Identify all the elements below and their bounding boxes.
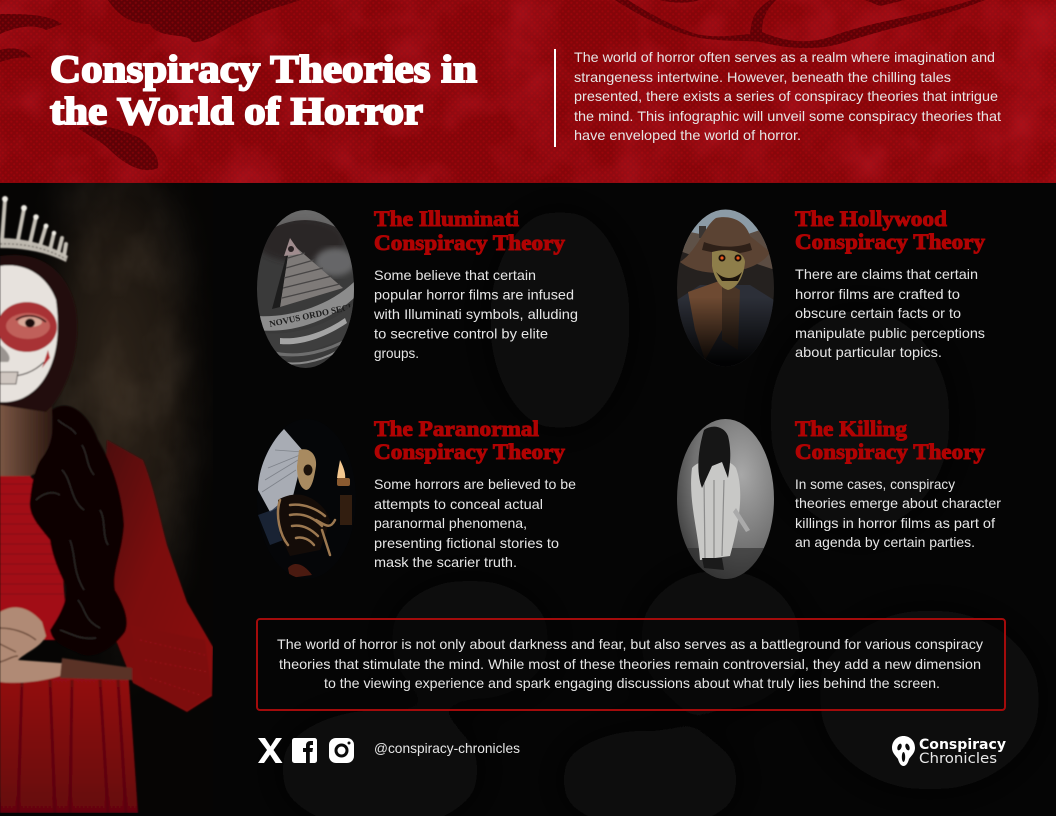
image: illuminati pyramid on dollar bill: NOVUS ORDO SECLORUM (268, 295, 383, 329)
text: hollywood: about particular topics. (795, 344, 942, 360)
panel: red header (0, 0, 1056, 183)
hat (680, 217, 770, 273)
heading: paranormal (374, 416, 565, 464)
text: illuminati: groups. (374, 345, 419, 361)
text: illuminati (373, 267, 578, 361)
heading: killing: The Killing (795, 416, 907, 441)
text: killing: killings in horror films as part of (795, 515, 995, 531)
heading: hollywood: Conspiracy Theory (795, 229, 985, 254)
image: skeleton with candle (258, 429, 352, 577)
text: hollywood: There are claims that certain (795, 266, 978, 282)
icon: facebook (292, 738, 317, 763)
heading: hollywood (795, 206, 985, 254)
intro text: strangeness intertwine. However, beneath the chilling tales (574, 69, 951, 85)
pyramid (280, 242, 343, 307)
heading: illuminati (374, 206, 565, 255)
paper fan (258, 429, 304, 512)
logo: conspiracy chronicles: Chronicles (919, 751, 997, 767)
text: hollywood: obscure certain facts or to (795, 305, 961, 321)
callout: conclusion: theories that stimulate the mind. While most of these theories remain controversial, they add a new dimension (279, 656, 981, 672)
sleeve (100, 440, 213, 712)
text: hollywood (795, 266, 985, 360)
intro text: presented, there exists a series of conspiracy theories that intrigue (574, 88, 998, 104)
intro text: The world of horror often serves as a realm where imagination and (574, 49, 995, 65)
icon: X (258, 738, 282, 763)
heading: illuminati: The Illuminati (374, 206, 519, 231)
callout: conclusion: to the viewing experience and spark engaging discussions about what truly lies behind the screen. (324, 675, 940, 691)
skirt (0, 668, 138, 813)
text: hollywood: horror films are crafted to (795, 286, 960, 302)
text: paranormal: paranormal phenomena, (374, 515, 527, 531)
image: ghost woman with knife (675, 417, 777, 582)
text: killing: an agenda by certain parties. (795, 534, 975, 550)
image: illuminati pyramid on dollar bill (257, 210, 354, 368)
skull face (712, 250, 745, 290)
text: illuminati: Some believe that certain (374, 267, 536, 283)
image: scarecrow (675, 208, 777, 370)
painted face (0, 265, 58, 402)
neck (0, 395, 52, 478)
shoulders and cloth (677, 285, 774, 366)
feet (702, 558, 724, 570)
ribs (278, 495, 330, 556)
heading: killing: Conspiracy Theory (795, 439, 985, 464)
knife (733, 508, 750, 532)
icon: scream mask (892, 736, 915, 766)
text: paranormal: mask the scarier truth. (374, 554, 517, 570)
text: killing: theories emerge about character (795, 495, 1001, 511)
hands (0, 607, 132, 683)
heading: hollywood: The Hollywood (795, 206, 947, 231)
hair (698, 427, 730, 488)
red eye mask (0, 302, 57, 352)
heading: paranormal: Conspiracy Theory (374, 439, 565, 464)
text: paranormal: attempts to conceal actual (374, 496, 543, 512)
text: killing (795, 476, 1001, 550)
text: illuminati: popular horror films are infused (374, 286, 574, 302)
tiara (0, 196, 68, 262)
hair: long black curls (30, 406, 127, 656)
logo: conspiracy chronicles: Conspiracy (919, 737, 1006, 753)
nose and mouth (0, 345, 10, 362)
text: illuminati: to secretive control by elite (374, 326, 548, 342)
skull (297, 449, 316, 490)
intro text: the mind. This infographic will unveil some conspiracy theories that (574, 108, 1001, 124)
title: Conspiracy Theories in (50, 48, 477, 91)
brown hair around face (0, 255, 77, 412)
heading: paranormal: The Paranormal (374, 416, 539, 441)
gown (691, 460, 740, 560)
text: paranormal: presenting fictional stories to (374, 535, 559, 551)
portrait: girl in sugar skull makeup and red dress (0, 183, 213, 813)
text: paranormal (374, 476, 576, 570)
logo: conspiracy chronicles (892, 736, 1006, 767)
callout: conclusion (257, 619, 1005, 710)
text: killing: In some cases, conspiracy (795, 476, 955, 492)
vertical divider (554, 49, 556, 147)
bodice (0, 476, 68, 640)
heading: killing (795, 416, 985, 464)
candle (337, 460, 345, 480)
text: illuminati: with Illuminati symbols, alluding (373, 306, 578, 322)
all-seeing eye (284, 238, 301, 256)
seal bands (256, 280, 356, 331)
callout: conclusion: The world of horror is not only about darkness and fear, but also serves as a battleground for various conspiracy (277, 636, 983, 652)
intro text: have enveloped the world of horror. (574, 127, 801, 143)
title: the World of Horror (50, 90, 423, 133)
heading: illuminati: Conspiracy Theory (374, 230, 565, 255)
dark branch silhouettes (0, 0, 985, 170)
text: paranormal: Some horrors are believed to be (374, 476, 576, 492)
title (50, 48, 477, 133)
social handle: @conspiracy-chronicles (374, 740, 520, 756)
text: hollywood: manipulate public perceptions (795, 325, 985, 341)
icon: instagram (329, 738, 354, 763)
intro text (574, 49, 1001, 143)
